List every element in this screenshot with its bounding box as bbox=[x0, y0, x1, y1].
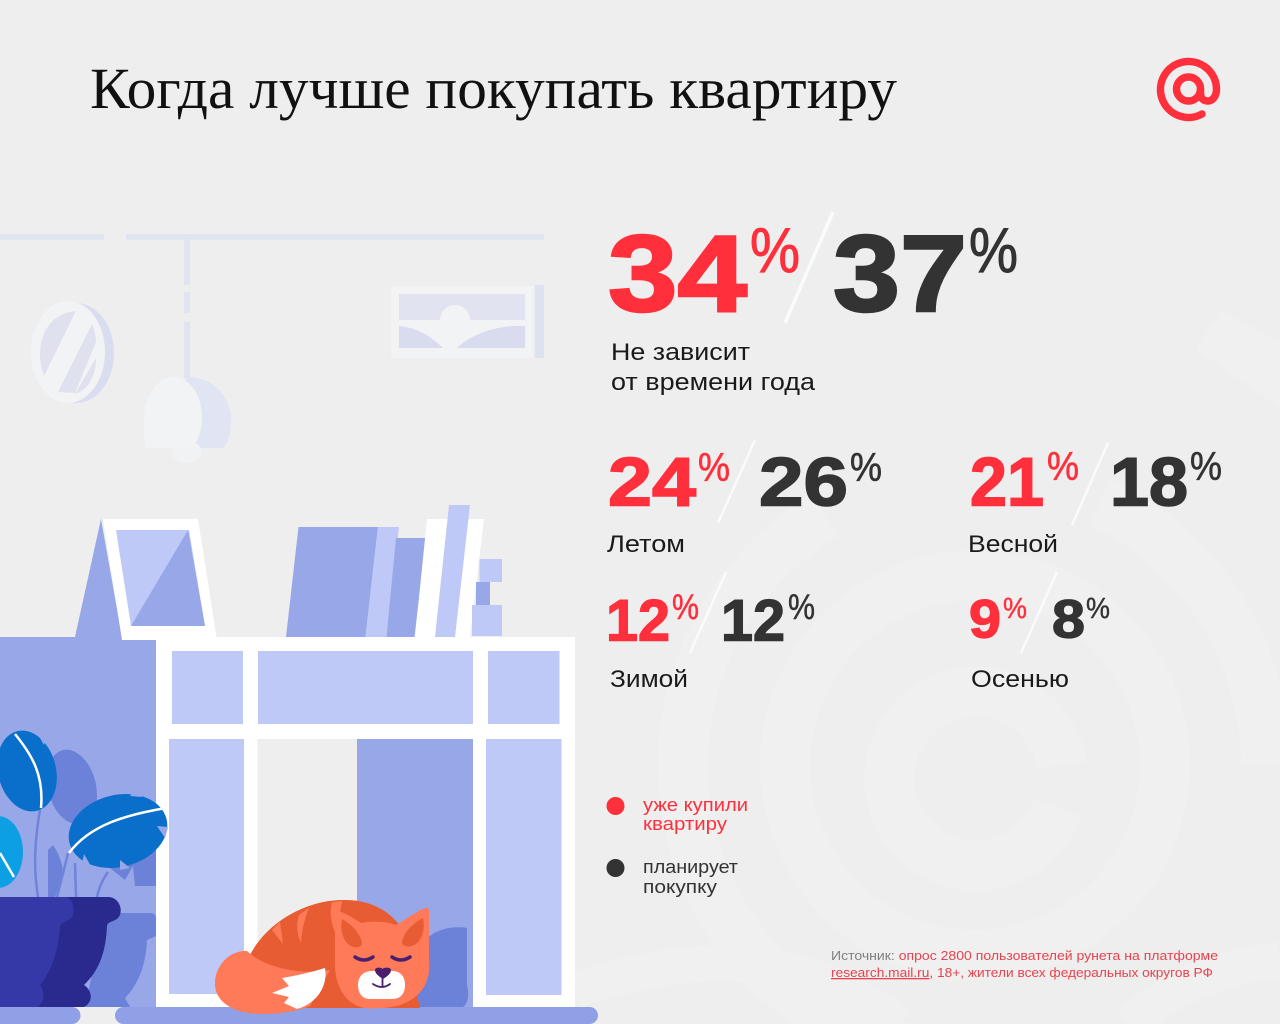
value: bought 9% bbox=[969, 590, 1027, 650]
value: bought 34%: % bbox=[750, 216, 800, 286]
value: planning 12%: % bbox=[788, 588, 815, 627]
cat head bbox=[335, 908, 429, 1008]
value: planning 26%: 26 bbox=[759, 444, 848, 520]
illustration: wardrobe and objects on top bbox=[0, 505, 598, 1024]
value: planning 12%: 12 bbox=[721, 588, 785, 654]
stat: spring bbox=[968, 443, 1222, 558]
cyan leaf bbox=[0, 816, 23, 888]
value: bought 24%: 24 bbox=[608, 444, 696, 520]
wall block and triangle bbox=[0, 519, 160, 1007]
top blue leaf bbox=[0, 724, 65, 818]
value: bought 12% bbox=[606, 588, 699, 654]
books bbox=[286, 505, 502, 637]
stat: autumn bbox=[969, 572, 1110, 693]
value: bought 21% bbox=[970, 444, 1079, 520]
divider slash bbox=[1072, 443, 1108, 525]
illustration: potted plant bbox=[0, 724, 175, 1007]
value: planning 18% bbox=[1110, 444, 1222, 520]
pot bbox=[0, 897, 121, 1007]
pillow bbox=[400, 927, 468, 1007]
cat ears bbox=[341, 918, 424, 947]
value: planning 26%: % bbox=[850, 446, 882, 490]
value: planning 12% bbox=[721, 588, 815, 654]
value: bought 21%: % bbox=[1047, 445, 1079, 489]
divider slash bbox=[690, 572, 726, 653]
floor shelves bbox=[0, 1007, 598, 1024]
title: Когда лучше покупать квартиру bbox=[90, 56, 897, 121]
value: bought 34% bbox=[608, 213, 800, 335]
value: planning 37%: % bbox=[969, 216, 1018, 286]
wardrobe bbox=[156, 637, 575, 1007]
right blue leaf bbox=[61, 784, 175, 878]
legend item: already bought: уже купили bbox=[643, 794, 748, 815]
label: Не зависит bbox=[611, 339, 750, 366]
icon: hanging lamp bbox=[144, 239, 231, 463]
value: planning 8%: % bbox=[1086, 593, 1110, 625]
stems bbox=[35, 810, 108, 897]
wall decor: shelf, mirror, lamp, picture bbox=[0, 234, 544, 463]
label: Осенью bbox=[971, 666, 1069, 693]
legend item: planning: покупку bbox=[643, 876, 718, 897]
source note: Источник: опрос 2800 пользователей рунета на платформе bbox=[831, 948, 1218, 963]
value: bought 9%: 9 bbox=[969, 590, 1001, 650]
value: planning 18%: % bbox=[1190, 445, 1222, 489]
value: bought 24%: % bbox=[698, 446, 730, 490]
value: planning 37% bbox=[833, 213, 1018, 335]
icon: framed picture bbox=[391, 285, 544, 358]
value: bought 12%: % bbox=[672, 588, 699, 627]
label bbox=[611, 339, 816, 396]
label: Летом bbox=[607, 531, 685, 558]
label: Зимой bbox=[610, 666, 688, 693]
cat eyes bbox=[355, 957, 410, 960]
cat tail bbox=[215, 951, 330, 1014]
divider slash bbox=[785, 212, 833, 323]
picture frame on top bbox=[103, 519, 217, 640]
shelf line bbox=[0, 234, 544, 240]
cat body bbox=[250, 900, 420, 1008]
value: planning 8% bbox=[1052, 590, 1110, 650]
stat: season independent bbox=[608, 212, 1018, 396]
legend item: planning bbox=[606, 856, 739, 897]
legend item: planning: планирует bbox=[643, 856, 739, 877]
divider slash bbox=[1021, 572, 1057, 653]
background watermark: large logo rings bbox=[575, 310, 1280, 1024]
value: bought 34%: 34 bbox=[608, 213, 747, 335]
legend item: already bought: квартиру bbox=[643, 813, 728, 834]
logo: at sign bbox=[1161, 61, 1216, 117]
plant shadow bbox=[40, 744, 156, 1007]
value: planning 18%: 18 bbox=[1110, 444, 1188, 520]
icon: round mirror bbox=[31, 301, 114, 403]
value: planning 26% bbox=[759, 444, 882, 520]
divider slash bbox=[718, 440, 755, 523]
value: planning 37%: 37 bbox=[833, 213, 967, 335]
cat nose and mouth bbox=[373, 968, 391, 987]
value: bought 9%: % bbox=[1003, 593, 1027, 625]
label: от времени года bbox=[611, 369, 816, 396]
value: bought 12%: 12 bbox=[606, 588, 670, 654]
value: bought 24% bbox=[608, 444, 730, 520]
stat: winter bbox=[606, 572, 815, 693]
source note bbox=[831, 948, 1218, 980]
cat tail tip bbox=[272, 968, 326, 1009]
cat muzzle bbox=[358, 971, 405, 999]
value: planning 8%: 8 bbox=[1052, 590, 1085, 650]
source note: research.mail.ru , 18+, жители всех федеральных округов РФ bbox=[831, 965, 1213, 980]
legend item: already bought bbox=[606, 794, 748, 834]
cat stripes bbox=[272, 901, 342, 944]
illustration: sleeping cat bbox=[215, 900, 468, 1014]
label: Весной bbox=[968, 531, 1058, 558]
legend bbox=[606, 794, 748, 897]
value: bought 21%: 21 bbox=[970, 444, 1044, 520]
stat: summer bbox=[607, 440, 882, 558]
